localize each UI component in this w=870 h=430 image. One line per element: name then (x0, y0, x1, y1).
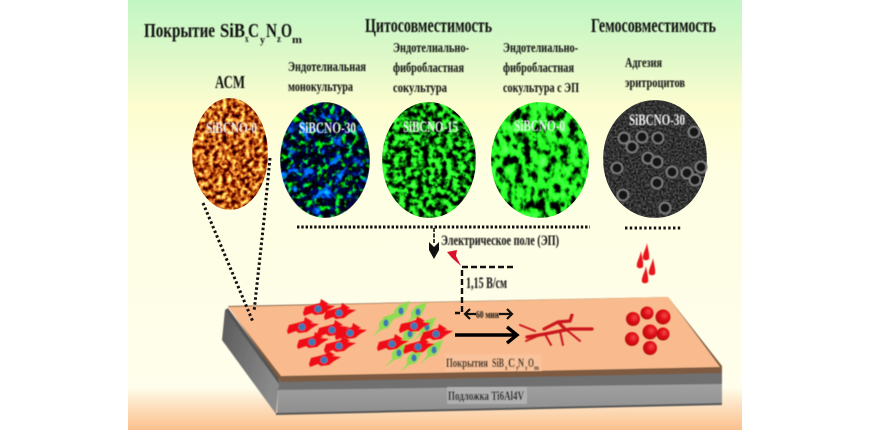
icon: lightning (447, 250, 461, 266)
dotted zoom lines from AFM (203, 158, 270, 322)
label: substrate: Подложка Ti6Al4V (448, 388, 524, 403)
heading: coating: SiB (220, 20, 245, 42)
dashed field pulse line (455, 267, 513, 313)
cell: elongated endothelial cell (520, 315, 592, 345)
icon: blood drops (637, 243, 655, 283)
heading: coating (144, 20, 303, 46)
arrow: 60 minutes: 60 мин (476, 310, 499, 321)
label: coating on slab: z (525, 364, 528, 372)
micrograph: erythrocyte SEM (603, 100, 708, 218)
heading: coating: m (292, 35, 303, 46)
arrow: 60 minutes (465, 309, 512, 321)
heading: coating: O (281, 20, 292, 42)
heading: cytocompatibility: Цитосовместимость (365, 15, 492, 37)
micrograph: coculture with field: SiBCNO-0 (514, 118, 565, 135)
heading: coating: y (260, 35, 265, 46)
micrograph: endothelial monoculture: SiBCNO-30 (299, 120, 356, 137)
erythrocytes on surface (625, 306, 670, 355)
label: coating on slab: x (505, 364, 508, 372)
heading: coating: N (266, 20, 277, 42)
label: substrate (447, 387, 527, 404)
micrograph: coculture with field (491, 102, 589, 218)
label: endothelial-fibroblast coculture: фибробластная (393, 61, 464, 76)
label: coating on slab (445, 354, 542, 372)
label: endothelial monoculture: монокультура (288, 80, 353, 95)
cell cluster: endothelial cells (287, 299, 367, 367)
label: endothelial-fibroblast coculture (393, 41, 469, 96)
label: erythrocyte adhesion: эритроцитов (625, 76, 685, 91)
cell cluster: coculture (372, 301, 453, 372)
label: coculture with electric field: сокультура с ЭП (503, 81, 579, 96)
slab substrate (222, 297, 722, 415)
label: coating on slab: SiB (492, 355, 504, 370)
heading: coating: Покрытие (144, 20, 215, 42)
label: coculture with electric field (503, 41, 579, 96)
dotted line: hemocompatibility bracket (625, 226, 681, 230)
label: field strength: 1,15 В/см (466, 275, 507, 292)
label: endothelial monoculture: Эндотелиальная (288, 60, 366, 75)
label: coating on slab: y (516, 364, 519, 372)
arrow: electric field down (429, 228, 439, 259)
arrow: culture transition (455, 327, 517, 343)
label: endothelial monoculture (288, 60, 366, 95)
heading: hemocompatibility: Гемосовместимость (591, 15, 716, 37)
heading: coating: C (248, 20, 259, 42)
label: erythrocyte adhesion (625, 56, 685, 91)
label: coating on slab: N (518, 355, 524, 370)
micrograph: AFM: SiBCNO-0 (206, 120, 257, 137)
label: coating on slab: Покрытия (446, 355, 488, 370)
heading: coating: x (245, 34, 248, 45)
heading: coating: z (277, 34, 281, 45)
label: coculture with electric field: фибробластная (503, 61, 574, 76)
label: coating on slab: C (508, 355, 515, 370)
label: coating on slab: m (534, 364, 539, 372)
label: endothelial-fibroblast coculture: сокультура (393, 81, 447, 96)
background panel (128, 0, 742, 430)
micrograph: coculture: SiBCNO-15 (403, 119, 458, 136)
dotted line: cytocompatibility bracket (297, 226, 590, 228)
micrograph: erythrocyte SEM: SiBCNO-30 (629, 112, 685, 129)
micrograph: endothelial monoculture (280, 102, 370, 218)
micrograph: AFM (192, 98, 268, 210)
label: electric field: Электрическое поле (ЭП) (441, 233, 559, 249)
label: endothelial-fibroblast coculture: Эндотелиально- (393, 41, 469, 56)
label: erythrocyte adhesion: Адгезия (625, 56, 662, 71)
micrograph: coculture (382, 102, 476, 218)
label: coculture with electric field: Эндотелиально- (503, 41, 578, 56)
label: coating on slab: O (528, 355, 534, 370)
label: AFM: АСМ (215, 72, 245, 92)
